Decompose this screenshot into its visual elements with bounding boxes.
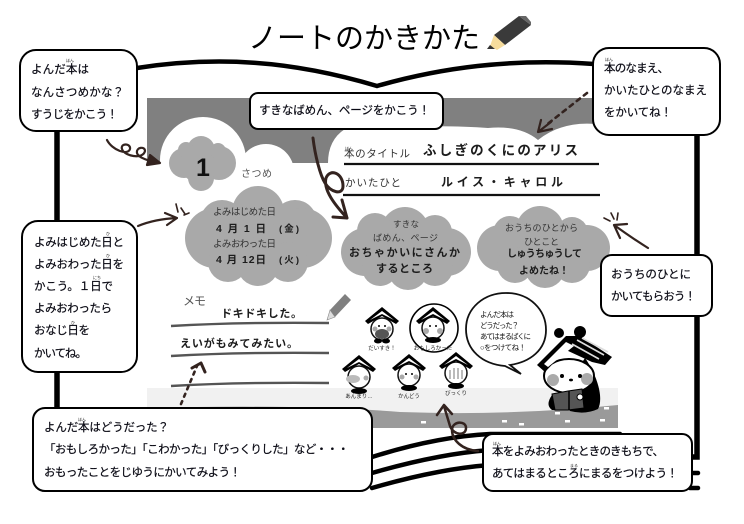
feeling: not much: [342, 355, 376, 400]
callout: book number: よんだ本は: [31, 62, 89, 76]
callout: book number: なんさつめかな？: [31, 86, 124, 99]
callout: book and author names: 本のなまえ、: [604, 61, 669, 75]
feeling: moved: かんどう: [398, 392, 420, 400]
cloud: family comment: [477, 206, 610, 288]
callout: reading dates: よみおわった日を: [34, 258, 124, 271]
ground band: [147, 388, 618, 428]
feeling: interesting (circled): [410, 304, 458, 352]
icon: gray pencil: [327, 294, 351, 320]
cloud: reading dates: よみおわった日: [213, 239, 276, 250]
feeling: favorite: [365, 307, 399, 352]
cloud: favorite page: [341, 207, 471, 290]
callout: reading dates: ひ: [71, 320, 75, 325]
open book outline: [57, 62, 698, 488]
callout: reading dates: ひ: [106, 253, 110, 258]
callout: favorite page: [250, 93, 443, 129]
callout: family comment: おうちのひとに: [611, 268, 691, 281]
cloud: book number: 1: [196, 154, 210, 182]
arrow: to family comment cloud: [604, 213, 648, 248]
callout: mark feelings: 本をよみおわったときのきもちで、: [492, 444, 664, 458]
cloud: book number: [169, 136, 236, 191]
callout: mark feelings: ほん: [493, 440, 501, 446]
icon: black marker pen: [487, 16, 531, 50]
author line: ルイス・キャロル: [441, 175, 563, 189]
cloud: reading dates: 4 月 1 日: [216, 223, 266, 235]
callout: book number: [20, 50, 137, 131]
feeling: interesting (circled): おもしろかった: [414, 345, 452, 352]
arrow: looped to feelings: [437, 405, 478, 451]
callout: reading dates: かいてね。: [34, 347, 87, 360]
callout: impressions: おもったことをじゆうにかいてみよう！: [44, 466, 241, 479]
cloud: favorite page: ばめん、ページ: [373, 233, 438, 243]
arrow: looped to favorite page cloud: [313, 138, 347, 218]
cloud: family comment: よめたね！: [519, 265, 569, 277]
callout: reading dates: ひ: [106, 231, 110, 236]
cloud: reading dates: 4 月 12日: [216, 254, 266, 266]
callout: family comment: かいてもらおう！: [611, 290, 696, 303]
callout: reading dates: [22, 221, 137, 372]
arrow: curly to book number: [107, 140, 160, 165]
callout: impressions: [33, 408, 372, 491]
callout: book and author names: ほん: [605, 56, 613, 62]
callout: impressions: 「おもしろかった」「こわかった」「びっくりした」など・・・: [44, 443, 349, 456]
title line: ふしぎのくにのアリス: [423, 142, 578, 158]
white cloud areas: [147, 117, 618, 388]
cloud: reading dates: (火): [279, 255, 299, 266]
callout: favorite page: すきなばめん、ページをかこう！: [259, 104, 430, 117]
callout: mark feelings: まる: [570, 462, 578, 468]
speech bubble: ○をつけてね！: [480, 343, 526, 352]
callout: book and author names: [593, 48, 720, 135]
memo area: メモ: [183, 294, 206, 308]
cloud: favorite page: すきな: [393, 219, 419, 229]
character: reading mascot with book on head: [537, 326, 612, 413]
title: ノートのかきかた: [248, 23, 480, 55]
memo area: ドキドキした。: [221, 307, 302, 320]
cloud: reading dates: (金): [279, 223, 299, 235]
callout: reading dates: よみはじめた日と: [34, 236, 124, 249]
feeling: favorite: だいすき！: [368, 345, 396, 352]
cloud: reading dates: よみはじめた日: [213, 207, 276, 218]
callout: book number: すうじをかこう！: [31, 108, 118, 121]
speech bubble: あてはまるばくに: [480, 332, 531, 341]
author line: [343, 175, 600, 195]
callout: reading dates: かこう。１日で: [34, 280, 113, 293]
title line: 本のタイトル: [344, 147, 410, 160]
worksheet header band: [147, 98, 596, 163]
feeling: not much: あんまり…: [345, 393, 373, 400]
author line: かいたひと: [345, 177, 401, 189]
arrow: dashed to title: [538, 93, 587, 132]
title line: [344, 142, 599, 164]
callout: reading dates: にち: [93, 274, 101, 280]
memo area: えいがもみてみたい。: [180, 336, 298, 350]
feeling: moved: [392, 354, 426, 400]
cloud: family comment: しゅうちゅうして: [507, 248, 582, 260]
cloud: family comment: おうちのひとから: [505, 223, 578, 233]
feeling: surprised: [439, 352, 473, 397]
speech bubble: どうだった？: [480, 321, 519, 330]
label: book count: さつめ: [241, 168, 272, 180]
arrow: dotted to memo: [181, 363, 205, 404]
cloud: family comment: ひとこと: [524, 237, 559, 247]
speech bubble: [466, 293, 546, 374]
callout: book and author names: かいたひとのなまえ: [604, 84, 707, 97]
title line: ほん: [345, 145, 353, 151]
cloud: reading dates: [185, 186, 332, 286]
arrow: to reading dates: [138, 204, 189, 226]
callout: book number: ほん: [66, 57, 74, 63]
callout: impressions: よんだ本はどうだった？: [44, 420, 169, 434]
callout: impressions: ほん: [78, 416, 86, 422]
cloud: favorite page: おちゃかいにさんか: [349, 246, 460, 259]
callout: mark feelings: [483, 434, 692, 491]
memo area: [171, 294, 329, 386]
callout: reading dates: おなじ日を: [34, 324, 90, 337]
feeling: surprised: びっくり: [445, 389, 467, 397]
callout: book and author names: をかいてね！: [604, 106, 672, 119]
panel: worksheet: [147, 98, 618, 428]
speech bubble: よんだ本は: [480, 309, 514, 319]
callout: family comment: [601, 255, 712, 316]
callout: mark feelings: あてはまるところにまるをつけよう！: [492, 467, 678, 480]
callout: reading dates: よみおわったら: [34, 302, 112, 315]
cloud: favorite page: するところ: [376, 262, 433, 275]
